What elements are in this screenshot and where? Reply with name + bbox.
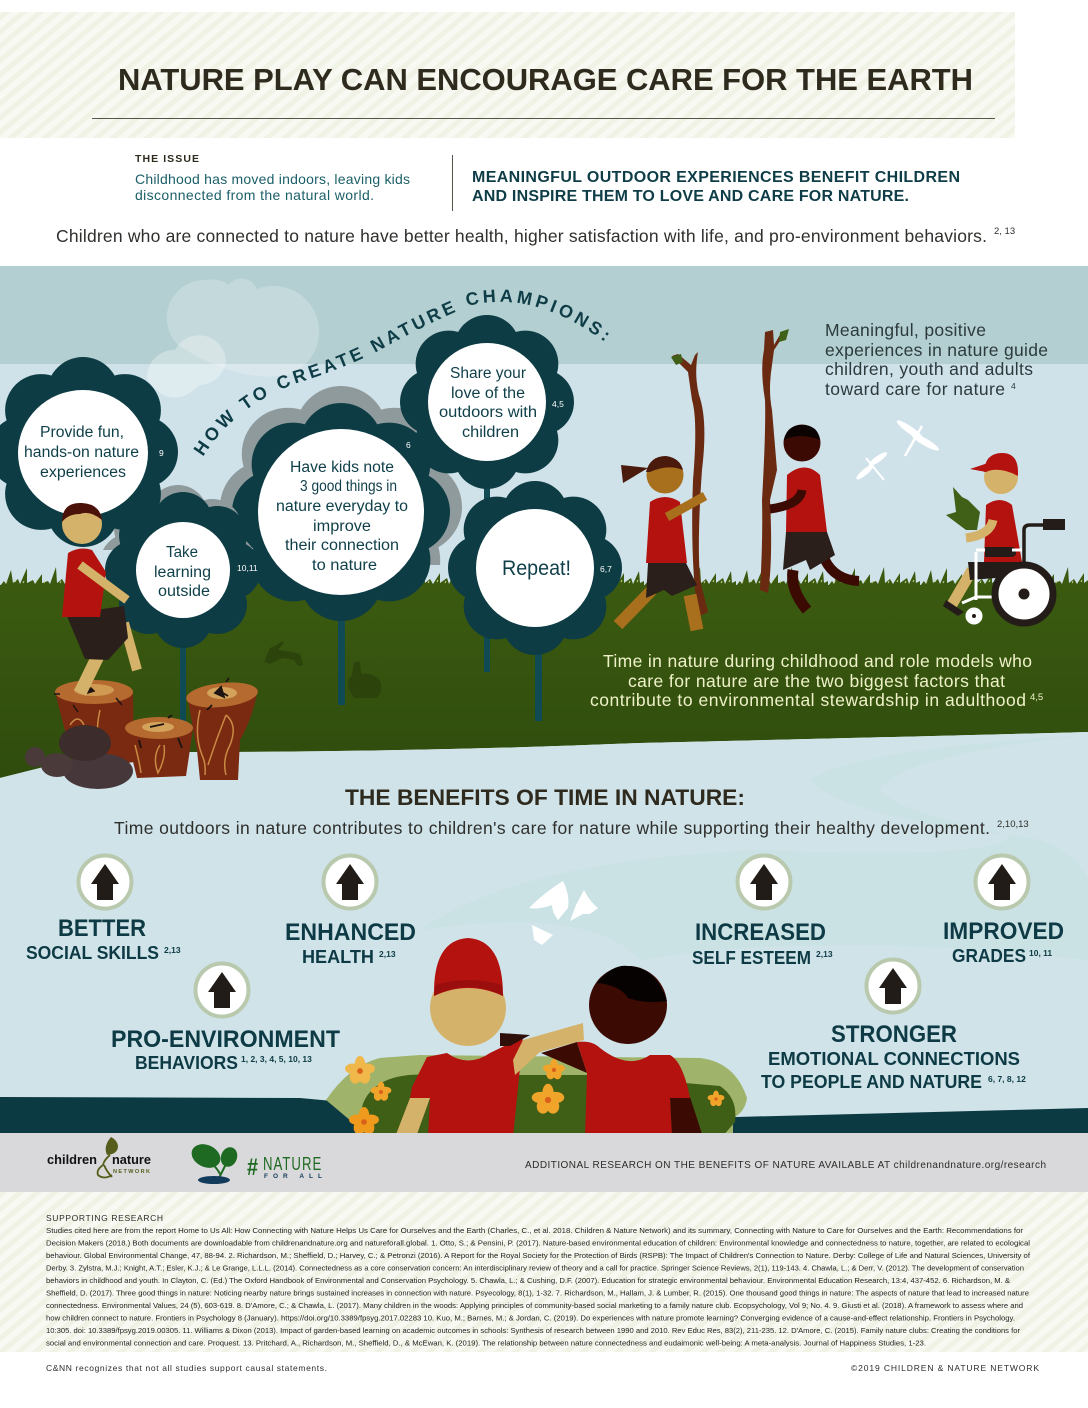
benefits intro text: 2,10,13	[997, 819, 1029, 830]
flower sign: share your love: outdoors with	[439, 404, 537, 421]
message: meaningful experiences: 4	[1011, 381, 1016, 391]
references: how children connect to nature. Frontiers in Psychology 8 (January). https://doi.org/10.3389/fpsyg.2017.02283 10. Kuo, M.; Barnes, M.; & Jordan, C. (2019). Do experiences with nature promote learning? Converging evidence of a cause-and-effect relationship. Frontiers in Psychology.	[46, 1314, 1015, 1322]
research heading: SUPPORTING RESEARCH	[46, 1213, 163, 1223]
flower sign: three good things: nature everyday to	[276, 498, 408, 515]
stump right	[187, 689, 258, 780]
benefit: increased self esteem: 2,13	[816, 949, 833, 959]
references: connectedness. Environmental Values, 24 (5), 603-619. 8. D'Amore, C.; & Chawla, L. (2017). Many children in the woods: Applying principles of community-based social marketing to a family nature club. Ecopsychology, Vol 9; No. 4. 9. Giusti et al. (2018). A framework to assess where and	[46, 1301, 1023, 1310]
flower sign: three good things: to nature	[312, 557, 377, 574]
message: time in nature: care for nature are the two biggest factors that	[628, 671, 1005, 691]
benefit: improved grades: GRADES	[952, 946, 1026, 966]
benefit: increased self esteem	[692, 856, 833, 968]
sky upper band	[0, 266, 1088, 364]
rocks	[25, 725, 133, 789]
benefit: pro-environment behaviors: PRO-ENVIRONMENT	[111, 1026, 340, 1053]
logo: children and nature network: NETWORK	[113, 1169, 150, 1175]
benefit: enhanced health: 2,13	[379, 949, 396, 959]
the issue text: Childhood has moved indoors, leaving kids	[135, 171, 410, 187]
connection statement: Children who are connected to nature have better health, higher satisfaction with life, and pro-environment behaviors.	[56, 226, 987, 246]
grass edge	[0, 562, 1088, 586]
flower sign: share your love: 4,5	[552, 399, 564, 409]
copyright: ©2019 CHILDREN & NATURE NETWORK	[851, 1363, 1039, 1373]
flower sign: three good things: 6	[406, 440, 411, 450]
flower sign: repeat: 6,7	[600, 564, 612, 574]
logo: nature for all	[188, 1140, 322, 1184]
heading: how to create nature champions: HOW TO CREATE NATURE CHAMPIONS:	[193, 290, 609, 456]
flower sign: share your love: love of the	[451, 385, 525, 402]
benefit: improved grades	[943, 856, 1064, 966]
benefit: improved grades: IMPROVED	[943, 918, 1064, 945]
references: Derby. 3. Zylstra, M.J.; Knight, A.T.; Esler, K.J.; & Le Grange, L.L.L. (2014). Connectedness as a core conservation concern: An interdisciplinary review of theory and a call for practice. Springer Science Reviews, 2(1), 119-143. 4. Chawla, L.; & Derr, V. (2012). The development of conservation	[46, 1264, 1024, 1272]
figure: boy on stump	[62, 503, 137, 693]
figure: child in wheelchair	[943, 453, 1065, 625]
flower sign: three good things: improve	[313, 518, 371, 535]
benefit: better social skills: 2,13	[164, 945, 181, 955]
sky lower band	[0, 364, 1088, 604]
message: meaningful experiences	[825, 320, 1048, 399]
leaf	[946, 487, 980, 530]
benefit: stronger emotional connections: STRONGER	[831, 1021, 957, 1048]
benefit: increased self esteem: INCREASED	[695, 919, 826, 946]
flower sign: three good things: 3 good things in	[300, 478, 397, 495]
benefit: better social skills: BETTER	[58, 915, 146, 942]
message: meaningful experiences: children, youth and adults	[825, 359, 1033, 379]
message: time in nature: 4,5	[1030, 692, 1043, 703]
references: behaviors in childhood and youth. In Clayton, C. (Ed.) The Oxford Handbook of Environmental and Conservation Psychology. 5. Chawla, L.; & Cushing, D.F. (2007). Education for strategic environmental behaviour. Environmental Education Research, 13:4, 437-452. 6. Richardson, M. &	[46, 1276, 1010, 1285]
references: behaviour. Global Environmental Change, 47, 88-94. 2. Richardson, M.; Sheffield, D.; Harvey, C.; & Petronzi (2016). A Report for the Royal Society for the Protection of Birds (RSPB): The Impact of Children's Connection to Nature. Derby: College of Life and Natural Sciences, University of	[46, 1251, 1031, 1260]
flower sign: share your love: Share your	[450, 365, 526, 382]
title: NATURE PLAY CAN ENCOURAGE CARE FOR THE EARTH	[118, 62, 973, 97]
orange flowers	[345, 1056, 724, 1135]
the issue block	[135, 153, 410, 203]
logo: nature for all: FOR ALL	[264, 1173, 322, 1180]
the issue label: THE ISSUE	[135, 153, 199, 165]
the issue text	[135, 171, 410, 203]
connection statement: 2, 13	[994, 226, 1015, 237]
child right	[670, 1097, 703, 1137]
benefit: pro-environment behaviors: BEHAVIORS	[135, 1053, 238, 1073]
references: 10:305. doi: 10.3389/fpsyg.2019.00305. 11. Williams & Dixon (2013). Impact of garden-based learning on academic outcomes in schools: Synthesis of research between 1990 and 2010. Rev Educ Res, 83(2), 211-235. 12. D'Amore, C. (2015). Family nature clubs: Creating the conditions for	[46, 1326, 1021, 1335]
flower sign: share your love: children	[462, 424, 519, 441]
flower sign: provide fun: 9	[159, 448, 164, 458]
panel: supporting research	[0, 1192, 1088, 1352]
stump left	[55, 692, 134, 770]
flower sign: take learning outside: outside	[158, 583, 210, 600]
benefit: enhanced health: HEALTH	[302, 947, 374, 967]
benefit: better social skills	[26, 856, 181, 963]
flower sign: provide fun	[0, 357, 178, 547]
logo: children and nature network: nature	[112, 1152, 151, 1167]
logo: nature for all: #	[247, 1154, 258, 1181]
benefit: stronger emotional connections: 6, 7, 8, 12	[988, 1074, 1026, 1084]
panel: how to create nature champions scene	[0, 266, 1088, 778]
flower sign: three good things	[220, 386, 462, 705]
references: Studies cited here are from the report Home to Us All: How Connecting with Nature Helps Us Care for Ourselves and the Earth (Charles, C., et al. 2018. Children & Nature Network) and its summary, Connecting with Nature to Care for Ourselves and the Earth: Recommendations for	[46, 1226, 1024, 1235]
icons: dragonflies	[855, 418, 941, 481]
logo: nature for all: NATURE	[263, 1154, 321, 1175]
benefit: pro-environment behaviors: 1, 2, 3, 4, 5, 10, 13	[241, 1054, 312, 1064]
message: time in nature: contribute to environmental stewardship in adulthood	[590, 690, 1026, 710]
flower sign: three good things: Have kids note	[290, 459, 394, 476]
bushes	[326, 1055, 747, 1137]
flower sign: share your love	[400, 315, 574, 672]
icons: butterflies	[529, 881, 598, 945]
flower sign: provide fun: hands-on nature	[24, 444, 139, 461]
child left	[395, 1098, 430, 1137]
key message	[472, 169, 960, 205]
message: time in nature	[590, 651, 1043, 710]
ground	[0, 585, 1088, 778]
logo: children and nature network	[47, 1137, 151, 1178]
references: Sheffield, D. (2017). Three good things in nature: Noticing nearby nature brings sustained increases in connection with nature. Psyecology, 8(1), 1-32. 7. Richardson, M., Hallam, J. & Lumber, R. (2015). One thousand good things in nature: The aspects of nature that lead to increased nature	[46, 1288, 1029, 1298]
flower sign: three good things: their connection	[285, 537, 399, 554]
icons: tree stumps	[25, 678, 259, 789]
benefit: enhanced health	[285, 856, 416, 967]
flower sign: take learning outside: 10,11	[237, 563, 258, 573]
references: Decision Makers (2018.) Both documents are downloadable from childrenandnature.org and natureforall.global. 1. Otto, S.; & Pensini, P. (2017). Nature-based environmental education of children: Environmental knowledge and connectedness to nature, together, are related to ecological	[46, 1238, 1030, 1248]
footer bar	[0, 1133, 1088, 1192]
figure: boy with stick	[760, 329, 859, 610]
flower sign: provide fun: Provide fun,	[40, 424, 124, 441]
message: meaningful experiences: Meaningful, positive	[825, 320, 986, 340]
stump front	[125, 729, 193, 778]
additional research link: ADDITIONAL RESEARCH ON THE BENEFITS OF NATURE AVAILABLE AT childrenandnature.org/research	[525, 1160, 1046, 1171]
flower sign: provide fun: experiences	[40, 464, 126, 481]
flower sign: repeat	[448, 481, 622, 721]
icons: rabbits	[264, 641, 381, 698]
clouds	[147, 279, 319, 398]
figure: girl with stick	[618, 352, 708, 630]
key message: AND INSPIRE THEM TO LOVE AND CARE FOR NATURE.	[472, 188, 909, 205]
flower sign: take learning outside: Take	[166, 544, 198, 561]
hill at bottom of benefits	[0, 1097, 1088, 1134]
benefit: improved grades: 10, 11	[1029, 948, 1052, 958]
flower sign: repeat: Repeat!	[502, 557, 571, 580]
message: time in nature: Time in nature during childhood and role models who	[603, 651, 1032, 671]
header band with stripes	[0, 12, 1015, 138]
benefit: pro-environment behaviors	[111, 964, 340, 1073]
heading: the benefits of time in nature: THE BENEFITS OF TIME IN NATURE:	[345, 785, 745, 810]
benefit: enhanced health: ENHANCED	[285, 919, 416, 946]
benefit: better social skills: SOCIAL SKILLS	[26, 943, 159, 963]
flower sign: take learning outside: learning	[154, 564, 211, 581]
panel: benefits background	[0, 732, 1088, 1133]
message: meaningful experiences: toward care for nature	[825, 379, 1005, 399]
flower sign: take learning outside	[100, 485, 261, 725]
disclaimer: C&NN recognizes that not all studies support causal statements.	[46, 1363, 327, 1373]
logo: children and nature network: children	[47, 1152, 97, 1167]
benefits intro text: Time outdoors in nature contributes to children's care for nature while supporting their healthy development.	[114, 818, 990, 838]
key message: MEANINGFUL OUTDOOR EXPERIENCES BENEFIT CHILDREN	[472, 169, 960, 186]
benefit: increased self esteem: SELF ESTEEM	[692, 948, 811, 968]
message: meaningful experiences: experiences in nature guide	[825, 340, 1048, 360]
benefit: stronger emotional connections: EMOTIONAL CONNECTIONS	[768, 1049, 1020, 1069]
benefit: stronger emotional connections: TO PEOPLE AND NATURE	[761, 1072, 982, 1092]
the issue text: disconnected from the natural world.	[135, 187, 374, 203]
illustration: two kids among bushes	[326, 938, 747, 1137]
references	[46, 1226, 1031, 1348]
references: social and environmental connection and care. Proquest. 13. Pritchard, A., Richardson, M., Sheffield, D., & McEwan, K. (2019). The relationship between nature connectedness and eudaimonic well-being: A meta-analysis. Journal of Happiness Studies, 1-23.	[46, 1338, 926, 1348]
benefit: stronger emotional connections	[761, 960, 1026, 1092]
